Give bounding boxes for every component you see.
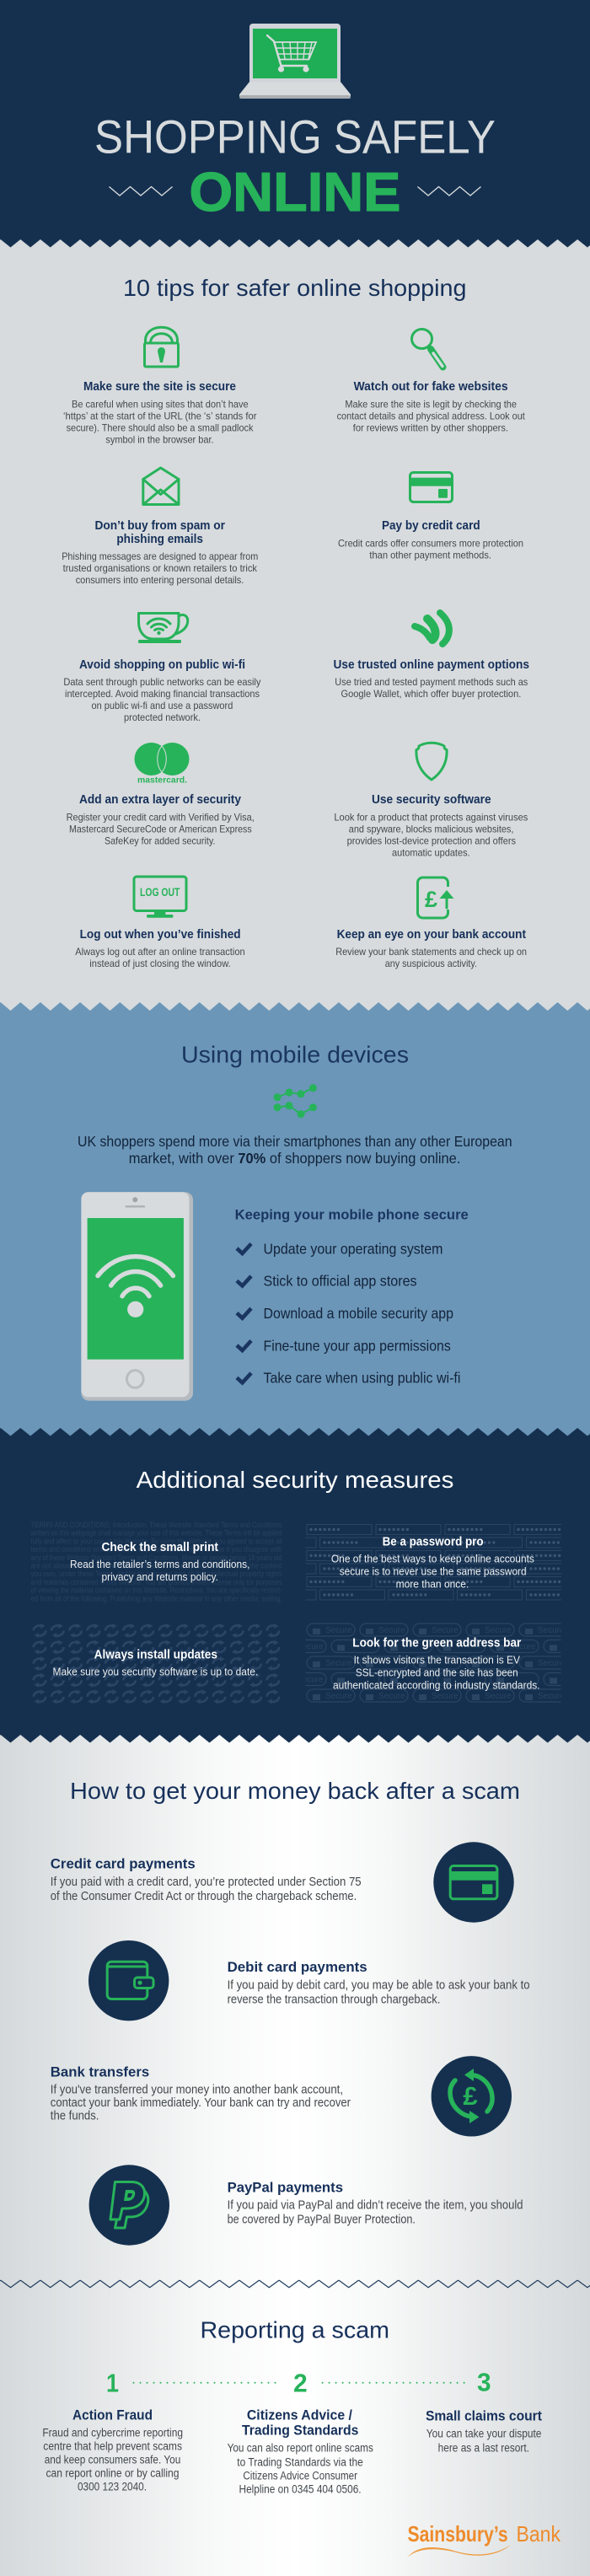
background: secure pills — [305, 1623, 561, 1703]
background: password fields — [305, 1524, 561, 1600]
tip text: and spyware, blocks malicious websites, — [349, 824, 513, 835]
step text: 0300 123 2040. — [78, 2481, 147, 2493]
card text: Read the retailer’s terms and conditions, — [70, 1558, 249, 1570]
item text: If you paid via PayPal and didn’t receive the item, you should — [228, 2199, 523, 2213]
item text: If you paid with a credit card, you’re protected under Section 75 — [51, 1876, 362, 1889]
tip: public wifi — [63, 614, 260, 723]
background: secure pills: Secure — [378, 1692, 405, 1701]
text: shoppers stat: UK shoppers spend more via their smartphones than any other European — [78, 1133, 512, 1150]
tip title: Make sure the site is secure — [83, 380, 236, 394]
background: terms text: and materials contained in this Website. You are granted limited license only for purposes — [31, 1578, 282, 1587]
panel: using mobile devices — [78, 1042, 512, 1401]
list item 5: Take care when using public wi-fi — [263, 1370, 460, 1387]
tip text: contact details and physical address. Look out — [337, 410, 525, 421]
tip text: Make sure the site is legit by checking the — [345, 398, 517, 410]
step text: centre that help prevent scams — [43, 2440, 182, 2453]
tip text: Be careful when using sites that don’t have — [72, 398, 249, 410]
tip text: Use tried and tested payment methods such as — [335, 676, 528, 688]
icon: wallet waves — [415, 613, 449, 644]
icon: pound with arrows in circle: £ — [463, 2081, 478, 2111]
step numbers with dotted connectors: 3 — [477, 2367, 491, 2397]
item text: contact your bank immediately. Your bank can try and recover — [51, 2096, 351, 2110]
item text — [51, 1876, 362, 1903]
icon: connected dots — [273, 1084, 317, 1118]
tip text: automatic updates. — [392, 847, 470, 859]
item: bank transfers — [51, 2056, 512, 2136]
tip text: SafeKey for added security. — [105, 835, 215, 847]
step text: You can also report online scams — [228, 2442, 373, 2455]
tip text: Google Wallet, which offer buyer protection. — [341, 688, 521, 700]
item text: If you paid by debit card, you may be able to ask your bank to — [228, 1978, 530, 1992]
tip text — [63, 676, 260, 723]
step 3: small claims court — [426, 2408, 542, 2454]
list item 4: Fine-tune your app permissions — [263, 1337, 451, 1354]
tip title: phishing emails — [116, 533, 203, 546]
tip: credit card — [338, 472, 523, 561]
background: terms text: you own, under these Terms, and/or its licensors own all the intellectual property rights — [31, 1570, 282, 1579]
icon: phone with pound and arrow — [418, 877, 453, 918]
tip text: consumers into entering personal details. — [76, 574, 244, 586]
icon: pound with arrows in circle — [432, 2056, 512, 2136]
step text — [426, 2427, 541, 2454]
card text — [70, 1558, 249, 1583]
background: terms text: of viewing the material contained on this Website. Restrictions: You are specifically restrict- — [31, 1586, 282, 1596]
tip text — [334, 812, 528, 859]
card text — [331, 1552, 534, 1590]
background: terms text: any of these Website Standard Terms and Conditions. Minors or people below 18 years old — [31, 1554, 282, 1563]
tip text — [338, 538, 523, 561]
item: credit card payments — [51, 1842, 514, 1923]
tip text: Always log out after an online transaction — [75, 946, 245, 958]
icon: phone with pound and arrow: £ — [425, 887, 437, 912]
item text: reverse the transaction through chargeback. — [228, 1993, 440, 2006]
panel: 10 tips — [62, 275, 529, 969]
icon: mastercard logo: mastercard. — [137, 775, 187, 786]
item text: be covered by PayPal Buyer Protection. — [228, 2214, 416, 2227]
item text — [51, 2083, 351, 2123]
step text: You can take your dispute — [426, 2427, 541, 2439]
text: shoppers stat: market, with over 70% of shoppers now buying online. — [129, 1150, 460, 1167]
item text — [228, 1978, 530, 2006]
background: terms text: fully and affect to your use of this Website. By using this Website, you agreed to accept all — [31, 1537, 282, 1546]
background: terms text: terms and conditions written in here. You must not use this Website if you disagree with — [31, 1545, 282, 1554]
icon: monitor log out — [134, 877, 186, 918]
tip text: Look for a product that protects against viruses — [334, 812, 528, 824]
tip text — [62, 550, 258, 586]
tip text: for reviews written by other shoppers. — [353, 421, 508, 433]
tip title: Pay by credit card — [382, 519, 480, 533]
step 1: action fraud — [42, 2408, 183, 2493]
logo: sainsbury's bank: Sainsbury’s — [408, 2521, 508, 2546]
background: secure pills: Secure — [297, 1642, 324, 1652]
step text: Helpline on 0345 404 0506. — [239, 2483, 362, 2496]
step text — [228, 2442, 373, 2496]
step title: Action Fraud — [72, 2408, 153, 2423]
heading: money back: How to get your money back after a scam — [70, 1778, 520, 1804]
panel: additional security measures — [30, 1467, 590, 1704]
step text — [42, 2427, 183, 2493]
tip text: protected network. — [124, 711, 201, 723]
item: debit card payments — [88, 1940, 530, 2021]
tip text: Phishing messages are designed to appear from — [62, 550, 258, 562]
tip text: on public wi-fi and use a password — [91, 700, 233, 711]
tip title: Use security software — [372, 793, 491, 807]
icon: laptop with shopping cart — [239, 24, 351, 99]
item title: Debit card payments — [228, 1959, 367, 1975]
item: paypal payments — [89, 2165, 523, 2246]
icon: smartphone with wifi — [81, 1192, 193, 1401]
tip text — [335, 676, 528, 700]
icon: padlock — [145, 327, 179, 367]
card text: Make sure you security software is up to date. — [52, 1665, 258, 1677]
tip: spam emails — [62, 468, 258, 586]
heading: 10 tips: 10 tips for safer online shopping — [123, 275, 467, 301]
background: secure pills: Secure — [509, 1642, 536, 1652]
background: terms text: TERMS AND CONDITIONS: Introduction. These Website Standard Terms and Conditions — [31, 1521, 282, 1530]
card text: secure is to never use the same password — [340, 1564, 527, 1577]
item text: the funds. — [51, 2110, 99, 2123]
background: secure pills: Secure — [378, 1626, 405, 1635]
card: be a password pro — [305, 1524, 561, 1600]
tip text: than other payment methods. — [369, 550, 491, 561]
icon: magnifier — [411, 329, 443, 368]
list item 2: Stick to official app stores — [263, 1273, 417, 1290]
card: check the small print — [30, 1521, 282, 1603]
background: secure pills: Secure — [538, 1659, 565, 1668]
tip title: Don’t buy from spam or — [94, 519, 225, 533]
icon: shield — [416, 743, 447, 780]
background: terms text: are not allowed to use this Website. Intellectual Property Rights: Other than the content — [31, 1561, 282, 1571]
background: secure pills: Secure — [325, 1626, 352, 1635]
step title: Citizens Advice / — [247, 2408, 352, 2423]
title: shopping safely: SHOPPING SAFELY — [94, 110, 496, 164]
tip text: instead of just closing the window. — [89, 958, 231, 969]
tip: extra security — [67, 743, 255, 847]
card text — [333, 1653, 540, 1691]
panel: header — [94, 24, 496, 223]
background: secure pills: Secure — [485, 1692, 512, 1701]
background: terms text: ed from all of the following. Publishing any Website material in any other media; selling, — [31, 1594, 282, 1603]
panel: money back after a scam — [51, 1778, 530, 2246]
tip title: Use trusted online payment options — [334, 658, 529, 672]
icon: paypal in circle — [89, 2165, 169, 2246]
card text: privacy and returns policy. — [101, 1570, 218, 1583]
step text: here as a last resort. — [438, 2441, 529, 2454]
card text: SSL-encrypted and the site has been — [356, 1666, 518, 1678]
tip: security software — [334, 743, 528, 859]
item text — [228, 2199, 523, 2227]
item title: Bank transfers — [51, 2063, 149, 2080]
tip title — [94, 519, 225, 546]
card text: more than once. — [396, 1577, 469, 1590]
step text: can report online or by calling — [46, 2467, 179, 2480]
background: terms text — [30, 1521, 282, 1603]
list item 1: Update your operating system — [263, 1240, 442, 1257]
tip title: Log out when you’ve finished — [80, 928, 241, 942]
step 2: citizens advice — [228, 2408, 373, 2496]
tip text: Mastercard SecureCode or American Express — [69, 824, 252, 835]
background: terms text: written on this webpage shall manage your use of this website. These Terms will be applied — [30, 1529, 282, 1538]
tip text: intercepted. Avoid making financial transactions — [65, 688, 260, 700]
list: keeping your phone secure — [235, 1208, 469, 1387]
text: shoppers stat — [78, 1133, 512, 1167]
tip title: Keep an eye on your bank account — [337, 928, 526, 942]
tip text: Review your bank statements and check up on — [335, 946, 527, 958]
step text: Citizens Advice Consumer — [243, 2470, 357, 2482]
step title: Small claims court — [426, 2408, 542, 2423]
list item 3: Download a mobile security app — [263, 1305, 453, 1322]
background: secure pills: Secure — [325, 1692, 352, 1701]
tip text: trusted organisations or known retailers to trick — [63, 562, 258, 574]
panel: reporting a scam — [42, 2316, 542, 2496]
tip text — [67, 812, 255, 847]
card title: Look for the green address bar — [352, 1635, 521, 1650]
background: secure pills: Secure — [432, 1626, 459, 1635]
step title — [242, 2408, 358, 2439]
heading: using mobile devices: Using mobile devices — [181, 1042, 409, 1068]
zigzag ornament left — [110, 187, 172, 196]
icon: envelope — [143, 468, 179, 504]
tip text: provides lost-device protection and offers — [347, 835, 516, 847]
item text: of the Consumer Credit Act or through the chargeback scheme. — [51, 1890, 357, 1903]
background: secure pills: Secure — [432, 1692, 459, 1701]
card title: Check the small print — [101, 1540, 218, 1554]
tip text: Register your credit card with Verified by Visa, — [67, 812, 255, 824]
list heading: Keeping your mobile phone secure — [235, 1208, 469, 1223]
card text: It shows visitors the transaction is EV — [354, 1653, 520, 1666]
background: refresh icons — [31, 1623, 282, 1704]
tip title: Avoid shopping on public wi-fi — [79, 658, 245, 672]
icon: mastercard logo — [135, 743, 189, 786]
icon: wallet in circle — [88, 1940, 169, 2021]
logo: sainsbury's bank — [407, 2521, 561, 2557]
step numbers with dotted connectors — [106, 2367, 491, 2397]
tip: bank account — [335, 877, 527, 969]
item title: Credit card payments — [51, 1856, 196, 1872]
tip title: Add an extra layer of security — [79, 793, 241, 807]
tip: site secure — [63, 327, 256, 445]
tip: payment options — [334, 613, 529, 700]
icon: credit card in circle — [433, 1842, 514, 1923]
logo: sainsbury's bank: Bank — [516, 2521, 561, 2546]
item title: PayPal payments — [228, 2180, 343, 2196]
card title: Always install updates — [94, 1647, 217, 1661]
tip text: any suspicious activity. — [385, 958, 477, 969]
zigzag ornament right — [418, 187, 480, 196]
step text: to Trading Standards via the — [237, 2456, 363, 2469]
background: secure pills: Secure — [538, 1692, 565, 1701]
step text: Fraud and cybercrime reporting — [42, 2427, 183, 2439]
heading: reporting a scam: Reporting a scam — [201, 2316, 389, 2343]
background: secure pills: Secure — [297, 1676, 324, 1684]
tip title: Watch out for fake websites — [354, 380, 508, 394]
tip: log out — [75, 877, 245, 969]
card: always install updates — [31, 1623, 282, 1704]
background: secure pills: Secure — [485, 1626, 512, 1635]
background: secure pills: Secure — [325, 1659, 352, 1668]
tip text — [75, 946, 245, 969]
tip text: Data sent through public networks can be easily — [63, 676, 260, 688]
tip text: Credit cards offer consumers more protection — [338, 538, 523, 550]
background: secure pills: Secure — [538, 1626, 565, 1635]
tip text: symbol in the browser bar. — [105, 433, 214, 445]
card title: Be a password pro — [383, 1534, 484, 1548]
card text: One of the best ways to keep online accounts — [331, 1552, 534, 1564]
icon: coffee cup with wifi — [138, 614, 188, 643]
heading: additional security measures: Additional security measures — [137, 1467, 453, 1493]
tip text: secure). There should also be a small padlock — [67, 421, 254, 433]
step title: Trading Standards — [242, 2423, 358, 2439]
tip: fake websites — [337, 329, 525, 433]
tip text: ‘https’ at the start of the URL (the ‘s’ stands for — [63, 410, 256, 421]
title: online: ONLINE — [189, 161, 401, 223]
icon: monitor log out: LOG OUT — [140, 885, 180, 899]
icon: credit card — [410, 472, 453, 502]
card text: authenticated according to industry standards. — [333, 1678, 540, 1691]
tip text — [337, 398, 525, 433]
step numbers with dotted connectors: 1 — [106, 2368, 119, 2397]
item text: If you've transferred your money into another bank account, — [51, 2083, 343, 2096]
tip text — [335, 946, 527, 969]
step text: and keep consumers safe. You — [45, 2454, 180, 2466]
card: green address bar — [305, 1623, 561, 1703]
tip text — [63, 398, 256, 445]
step numbers with dotted connectors: 2 — [293, 2368, 308, 2397]
